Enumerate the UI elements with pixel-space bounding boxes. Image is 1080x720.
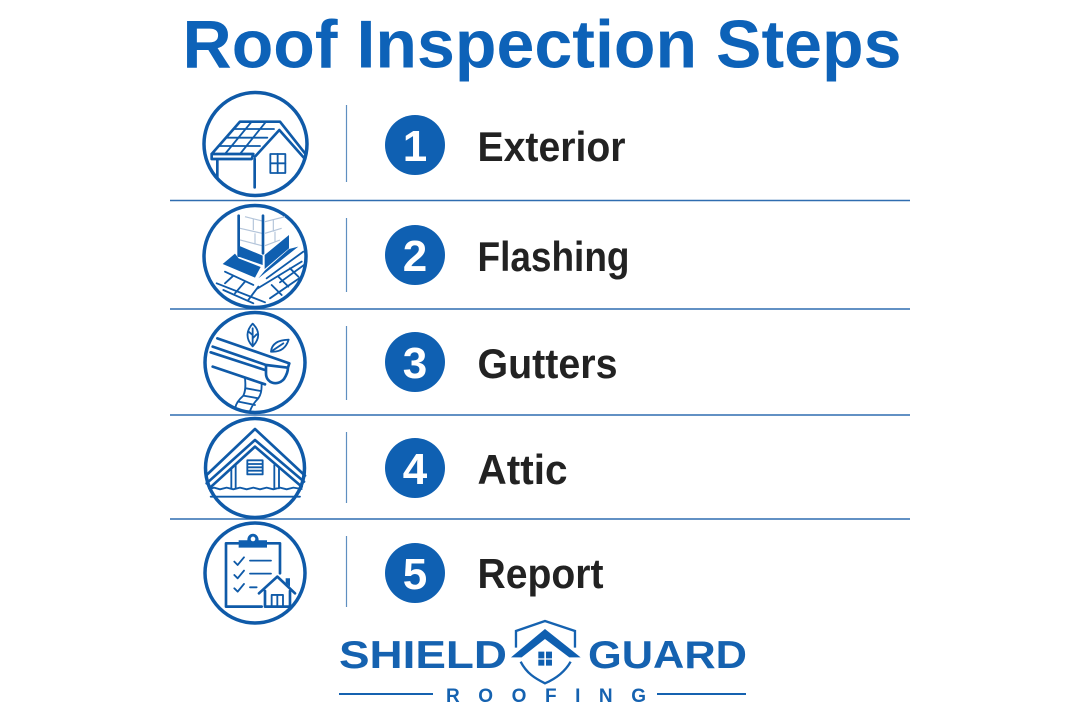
- step 2: flashing: [204, 206, 630, 308]
- title: Roof Inspection Steps: [182, 6, 902, 82]
- number badge 2: 2: [403, 232, 427, 281]
- step 5: report: [205, 523, 604, 623]
- label: Gutters: Gutters: [478, 340, 618, 387]
- logo: Shield Guard Roofing: [339, 621, 747, 707]
- icon: clipboard with house: [205, 523, 305, 623]
- logo wordmark right: GUARD: [588, 634, 747, 677]
- number badge 1: [385, 115, 445, 175]
- number badge 4: 4: [403, 445, 428, 494]
- icon: house with shingled roof: [204, 92, 307, 196]
- logo shield emblem: [511, 621, 581, 683]
- icon: attic cross-section: [206, 418, 305, 518]
- label: Report: Report: [478, 550, 604, 597]
- number badge 5: 5: [403, 550, 427, 599]
- number badge 3: [385, 332, 445, 392]
- icon: chimney flashing: [204, 206, 306, 308]
- step 3: gutters: [205, 312, 618, 412]
- step 1: exterior: [204, 92, 626, 196]
- number badge 3: 3: [403, 339, 427, 388]
- logo wordmark left: SHIELD: [339, 634, 507, 677]
- number badge 4: [385, 438, 445, 498]
- logo sub-line: ROOFING: [446, 686, 646, 707]
- label: Attic: Attic: [478, 446, 568, 493]
- label: Exterior: Exterior: [478, 123, 626, 170]
- label: Flashing: Flashing: [478, 233, 630, 280]
- number badge 2: [385, 225, 445, 285]
- icon: gutter and leaves: [205, 312, 305, 412]
- number badge 5: [385, 543, 445, 603]
- step 4: attic: [206, 418, 568, 518]
- number badge 1: 1: [403, 122, 427, 171]
